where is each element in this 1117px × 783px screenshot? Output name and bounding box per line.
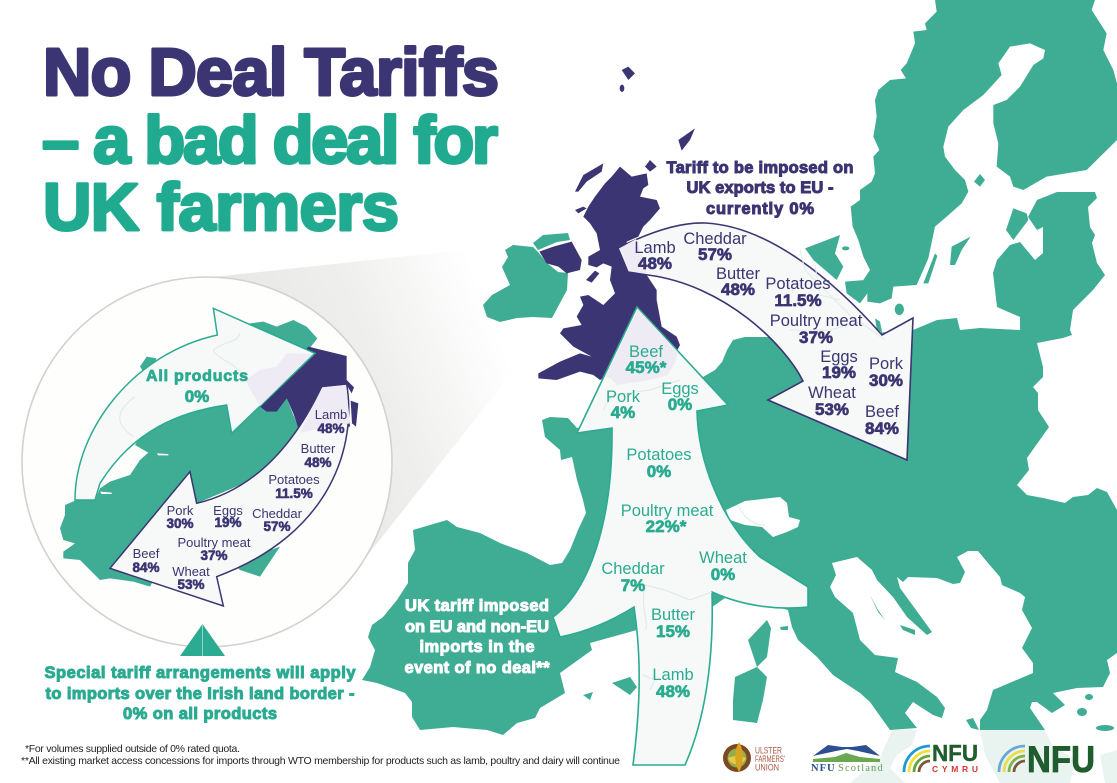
export: poultry meat <box>770 312 863 347</box>
label: butter: 48% <box>304 455 332 470</box>
label: all products 0%: 0% <box>185 387 209 406</box>
label: all products 0%: All products <box>146 368 248 385</box>
import: wheat <box>699 549 747 584</box>
export: butter: Butter <box>716 265 761 283</box>
label: lamb: Lamb <box>315 407 347 422</box>
export: poultry meat: Poultry meat <box>770 312 863 330</box>
export: potatoes: Potatoes <box>765 275 831 293</box>
logo: NFU Scotland: Scotland <box>838 763 884 774</box>
export: potatoes: 11.5% <box>774 291 822 310</box>
logo: NFU <box>999 739 1095 780</box>
arrow: north to south with tariffs <box>110 384 350 606</box>
import: eggs: Eggs <box>661 380 699 398</box>
map: Switzerland cut-out <box>726 497 800 537</box>
arrow: UK tariff on imports <box>553 307 808 765</box>
export tariffs list <box>634 230 904 438</box>
import: beef: 45%* <box>626 358 667 377</box>
label: poultry meat: Poultry meat <box>178 535 251 550</box>
export: beef <box>865 403 899 438</box>
title <box>42 35 499 245</box>
text: special tariff arrangements: Special tariff arrangements will apply <box>44 664 356 682</box>
label: potatoes: 11.5% <box>275 486 313 501</box>
callout: UK tariff on imports: on EU and non-EU <box>405 618 549 636</box>
label: potatoes: Potatoes <box>268 472 320 487</box>
logo: Ulster Farmers' Union: FARMERS' <box>755 754 785 764</box>
export: butter <box>716 265 761 299</box>
import: lamb: 48% <box>656 682 690 701</box>
arrow: all products, south to north <box>75 308 315 500</box>
label: all products 0% <box>146 368 248 406</box>
label: cheddar: Cheddar <box>252 506 303 521</box>
footnotes: **All existing market access concessions for imports through WTO membership for products such as lamb, poultry and dairy will continue <box>21 755 620 767</box>
label: eggs <box>213 503 243 530</box>
footnotes: *For volumes supplied outside of 0% rated quota. <box>25 743 240 755</box>
footnotes <box>21 743 620 767</box>
export: wheat: 53% <box>815 400 849 419</box>
import: pork: Pork <box>606 388 641 406</box>
logo: NFU Cymru: CYMRU <box>932 764 978 774</box>
map of Europe <box>362 0 1117 783</box>
zoom cone <box>213 246 530 590</box>
export: cheddar: Cheddar <box>683 230 747 248</box>
map: Scandinavia and Finland <box>805 0 1117 333</box>
label: beef: Beef <box>133 546 160 561</box>
map: Ireland <box>483 245 568 322</box>
label: pork: 30% <box>166 516 194 531</box>
logo: NFU Cymru: NFU <box>932 740 978 766</box>
callout: UK tariff on imports: imports in the <box>420 638 534 656</box>
label: cheddar <box>252 506 303 534</box>
logo: Ulster Farmers' Union: ULSTER <box>755 746 782 756</box>
import: potatoes: 0% <box>647 462 671 481</box>
import tariffs list <box>601 343 747 701</box>
map: mainland Europe <box>362 192 1117 735</box>
export: pork: 30% <box>869 371 903 390</box>
text: special tariff arrangements: 0% on all products <box>123 705 277 723</box>
logo: NFU: NFU <box>1027 739 1095 780</box>
import: eggs: 0% <box>668 395 692 414</box>
heading: tariff on UK exports: Tariff to be imposed on <box>666 159 854 177</box>
export: lamb: 48% <box>638 254 672 273</box>
export: poultry meat: 37% <box>799 328 833 347</box>
label: beef <box>132 546 160 575</box>
logo: Ulster Farmers' Union <box>723 742 785 772</box>
import: potatoes <box>626 446 692 481</box>
export: lamb <box>634 239 676 273</box>
text: special tariff arrangements: to imports over the Irish land border - <box>46 685 354 703</box>
label: cheddar: 57% <box>263 519 291 534</box>
label: eggs: Eggs <box>213 503 243 518</box>
heading: tariff on UK exports <box>666 159 854 218</box>
import: butter: 15% <box>656 622 690 641</box>
import: wheat: Wheat <box>699 549 747 567</box>
export: pork: Pork <box>869 355 904 373</box>
label: lamb: 48% <box>317 421 345 436</box>
export: pork <box>869 355 904 390</box>
label: eggs: 19% <box>214 515 242 530</box>
title: UK farmers <box>43 170 399 245</box>
callout: UK tariff on imports <box>404 597 550 677</box>
import: lamb <box>652 666 694 701</box>
label: poultry meat: 37% <box>200 548 228 563</box>
title: – a bad deal for <box>42 103 498 178</box>
import: wheat: 0% <box>711 565 735 584</box>
text: special tariff arrangements <box>44 664 356 723</box>
heading: tariff on UK exports: currently 0% <box>706 200 814 218</box>
export: eggs: Eggs <box>820 348 858 366</box>
export: eggs <box>820 348 858 382</box>
import: cheddar: 7% <box>621 576 645 595</box>
export: potatoes <box>765 275 831 310</box>
import: lamb: Lamb <box>652 666 694 684</box>
arrow: tariff on UK exports <box>618 223 913 460</box>
inset map <box>60 320 358 587</box>
label: wheat: Wheat <box>172 564 210 579</box>
import: cheddar: Cheddar <box>601 560 665 578</box>
import: poultry meat: Poultry meat <box>621 502 714 520</box>
title: No Deal Tariffs <box>43 35 499 110</box>
import: beef <box>626 343 667 377</box>
label: wheat <box>172 564 210 592</box>
map: United Kingdom <box>538 67 695 385</box>
export: beef: 84% <box>865 419 899 438</box>
export: cheddar <box>683 230 747 264</box>
export: eggs: 19% <box>822 363 856 382</box>
import: cheddar <box>601 560 665 595</box>
pale map beneath the logos <box>850 730 1117 783</box>
export: lamb: Lamb <box>634 239 676 257</box>
label: poultry meat <box>178 535 251 563</box>
export: wheat <box>808 384 856 419</box>
logo: NFU Cymru <box>904 740 978 774</box>
icon: Irish border triangle <box>180 624 225 656</box>
export: butter: 48% <box>721 280 755 299</box>
import: butter <box>651 606 696 641</box>
import: eggs <box>661 380 699 414</box>
label: wheat: 53% <box>177 577 205 592</box>
import: pork <box>606 388 641 422</box>
export: beef: Beef <box>865 403 899 421</box>
label: potatoes <box>268 472 320 501</box>
export: cheddar: 57% <box>698 245 732 264</box>
label: lamb <box>315 407 347 436</box>
import: pork: 4% <box>611 403 635 422</box>
logo: NFU Scotland: NFU <box>811 763 836 774</box>
export: wheat: Wheat <box>808 384 856 402</box>
label: butter <box>301 441 336 470</box>
logo: NFU Scotland <box>811 745 884 774</box>
import: potatoes: Potatoes <box>626 446 692 464</box>
label: beef: 84% <box>132 560 160 575</box>
callout: UK tariff on imports: UK tariff imposed <box>405 597 549 615</box>
heading: tariff on UK exports: UK exports to EU - <box>686 179 834 197</box>
import: poultry meat <box>621 502 714 536</box>
panel: Irish border inset circle <box>22 277 392 647</box>
label: pork: Pork <box>167 503 194 518</box>
import: beef: Beef <box>629 343 663 361</box>
callout: UK tariff on imports: event of no deal** <box>404 659 550 677</box>
map: Mediterranean islands <box>583 595 1114 731</box>
label: butter: Butter <box>301 441 336 456</box>
label: pork <box>166 503 194 531</box>
import: poultry meat: 22%* <box>646 517 687 536</box>
import: butter: Butter <box>651 606 696 624</box>
logo: Ulster Farmers' Union: UNION <box>755 762 779 772</box>
